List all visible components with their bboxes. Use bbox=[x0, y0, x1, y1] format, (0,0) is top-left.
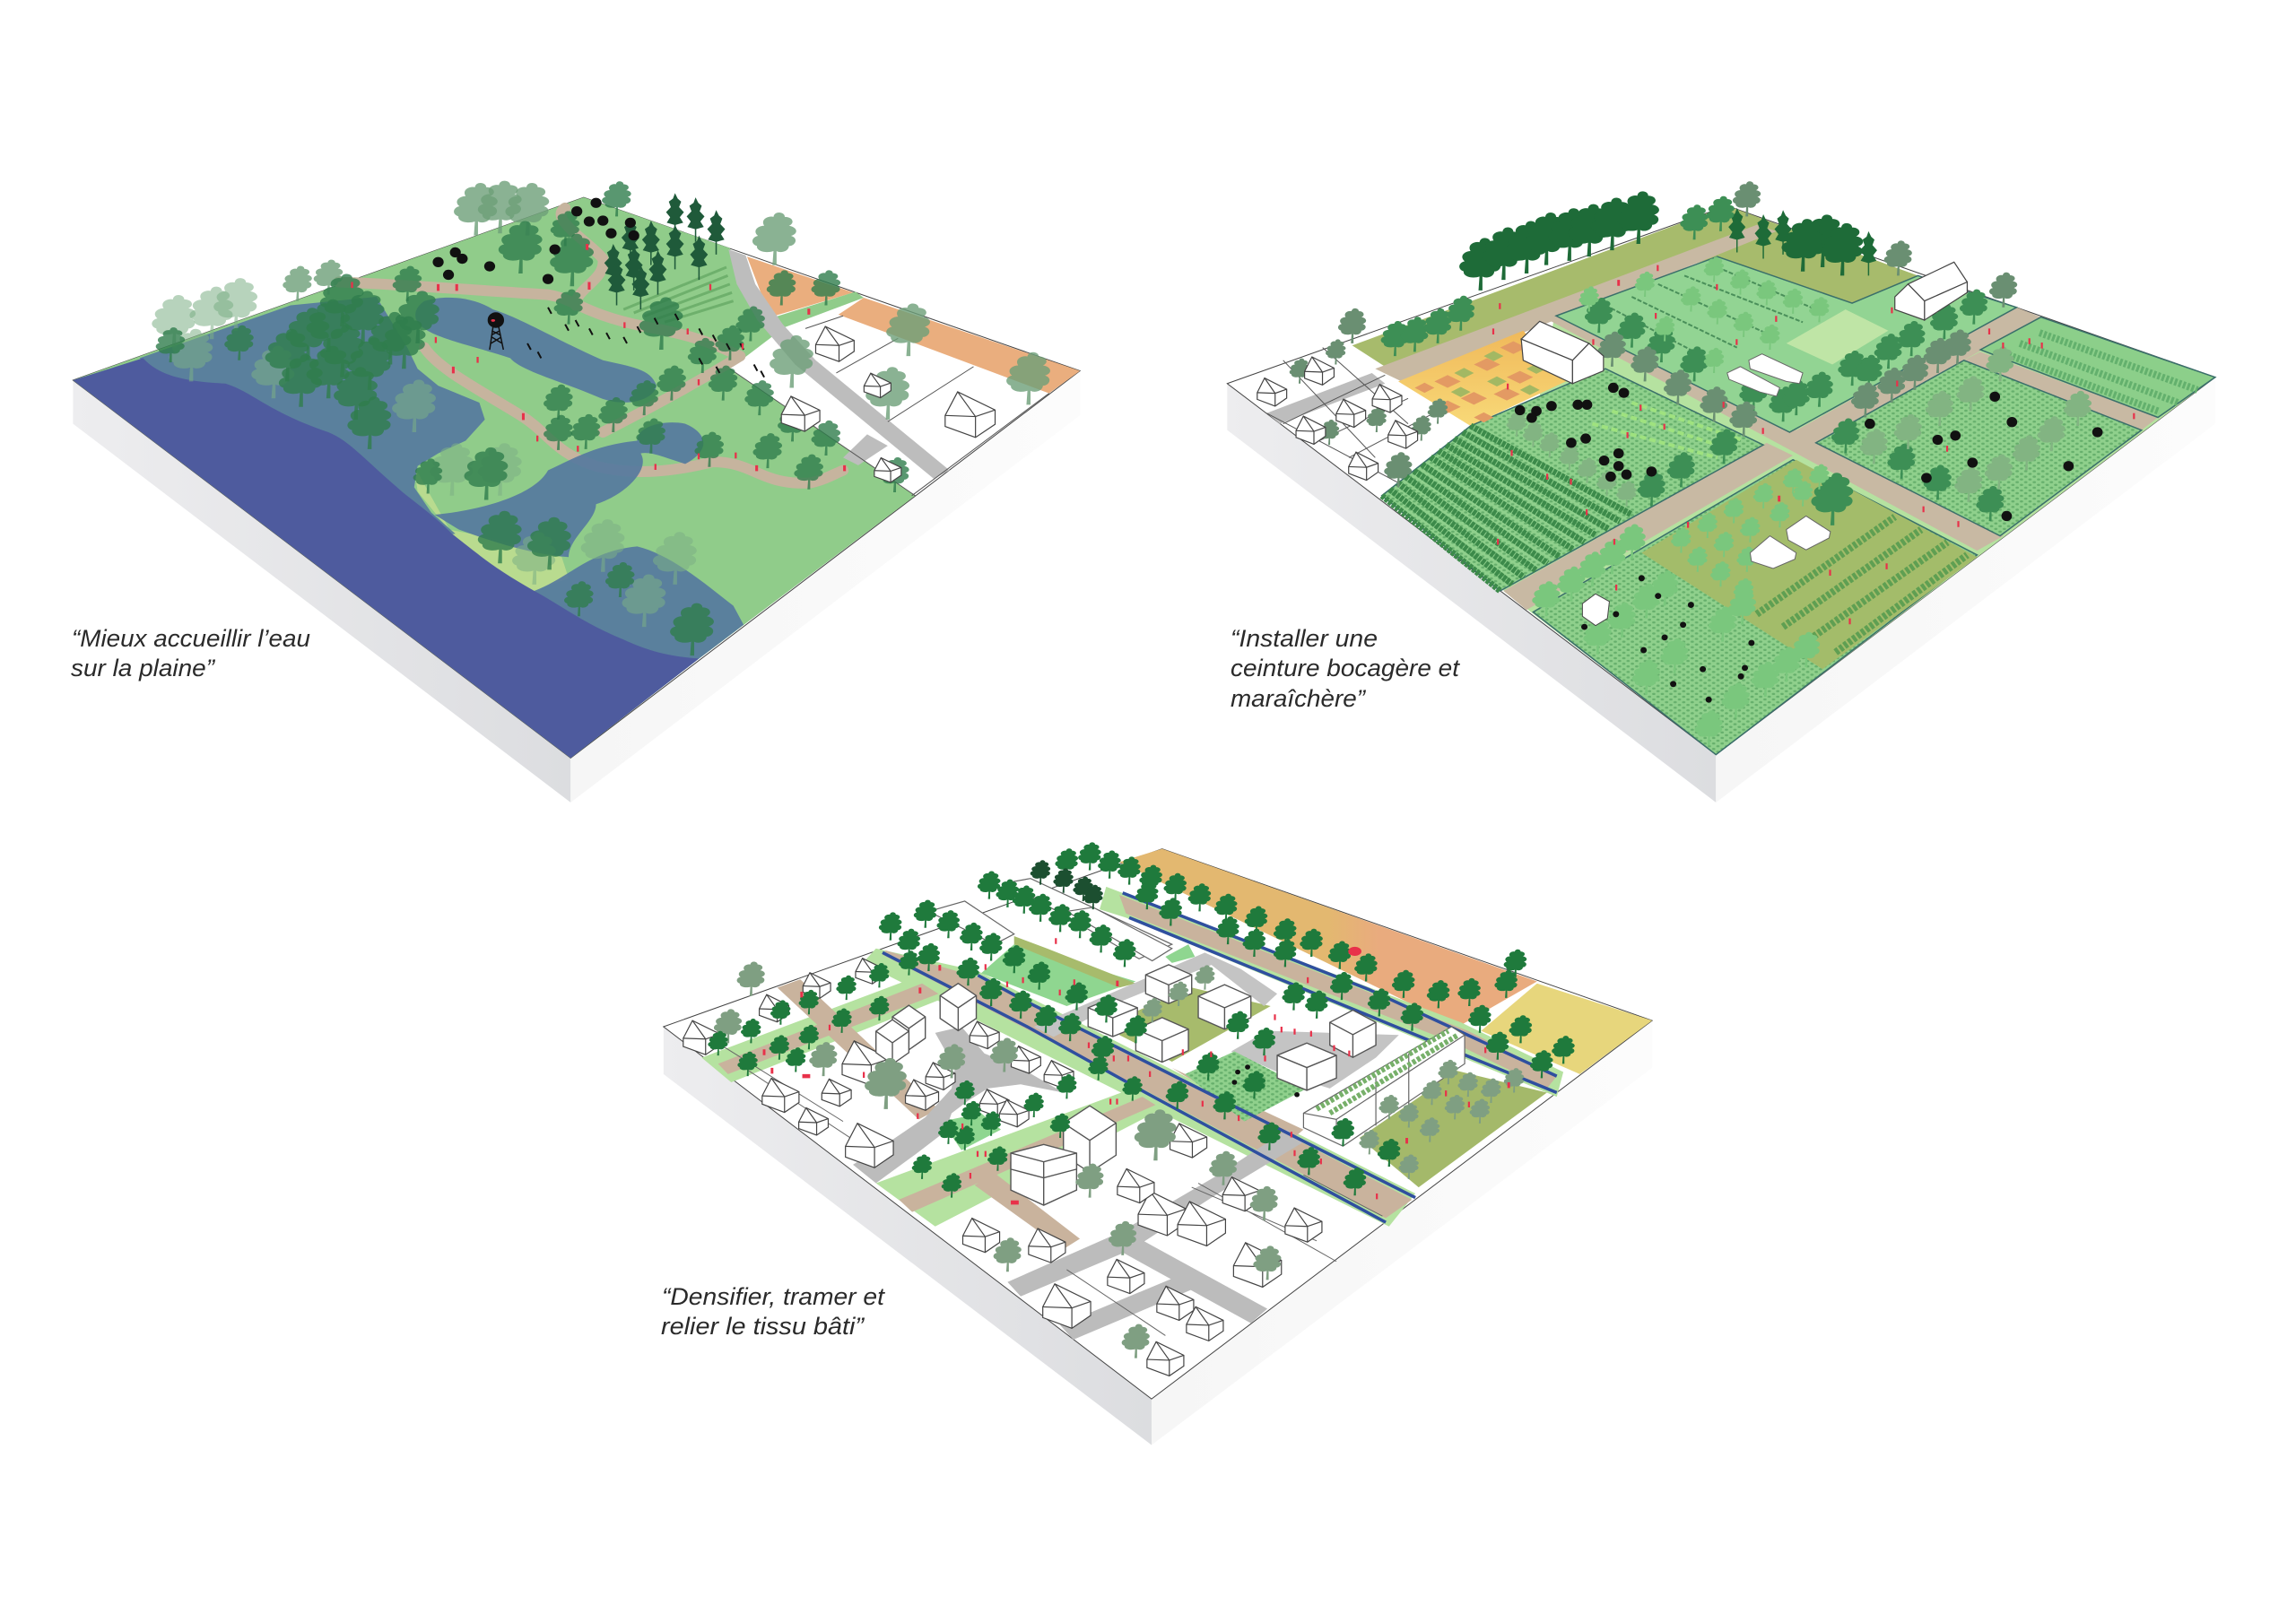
grey curved road bbox=[853, 1027, 1064, 1184]
block left side bbox=[664, 1027, 1152, 1445]
walkers bbox=[351, 244, 846, 471]
panel: bocage and market gardening block diagram bbox=[1227, 181, 2215, 803]
block top surface bbox=[664, 849, 1652, 1399]
block left side bbox=[1227, 384, 1716, 803]
roads bbox=[1375, 225, 2158, 610]
barn: right bbox=[1895, 262, 1967, 320]
field: orchard bbox=[1641, 460, 1977, 669]
hedgerow strip bbox=[1352, 206, 1918, 369]
upper corridor track bbox=[1119, 895, 1557, 1089]
lower corridor verge bbox=[863, 949, 1415, 1227]
cross streets bbox=[701, 977, 1162, 1227]
block right side bbox=[1716, 378, 2215, 803]
block left side bbox=[73, 380, 570, 803]
animals bbox=[1231, 1064, 1300, 1098]
crop rows bbox=[1382, 426, 1631, 591]
field: flower plot bbox=[1398, 331, 1566, 426]
upper corridor bbox=[1100, 887, 1563, 1097]
yellow field bbox=[1481, 984, 1652, 1074]
grey road bbox=[728, 249, 950, 479]
caption: water: “Mieux accueillir l’eau bbox=[72, 625, 310, 652]
field: middle left bbox=[1382, 369, 1763, 591]
shed bbox=[1582, 594, 1609, 626]
greenhouse rooftop building bbox=[1303, 1027, 1465, 1146]
block top surface bbox=[73, 197, 1080, 758]
light orchard trees bbox=[1532, 256, 1830, 745]
caption: water: sur la plaine” bbox=[71, 655, 215, 681]
mid green trees bbox=[1381, 196, 2005, 525]
caption: bocage bbox=[1231, 625, 1461, 712]
green patches among flowers bbox=[1451, 351, 1546, 397]
field: top right bbox=[1980, 317, 2215, 417]
village road bbox=[1266, 373, 1385, 424]
caption: bocage: “Installer une bbox=[1231, 625, 1378, 652]
riparian and meadow trees bbox=[156, 181, 909, 655]
caption: water bbox=[71, 625, 310, 681]
livestock bbox=[1515, 383, 2102, 521]
plantation trees bbox=[1459, 191, 1877, 291]
houses bbox=[683, 959, 1322, 1376]
caption: built fabric: relier le tissu bâti” bbox=[661, 1313, 865, 1340]
block right side bbox=[1152, 1020, 1652, 1445]
caption: built fabric bbox=[661, 1283, 886, 1340]
tractor bbox=[1348, 947, 1361, 956]
green strip with path bbox=[775, 291, 864, 328]
lot boundaries bbox=[730, 316, 1049, 496]
vine block bbox=[1787, 309, 1888, 365]
houses bbox=[781, 326, 996, 482]
olive orchard bbox=[1360, 1068, 1547, 1187]
greenhouses bbox=[1727, 354, 1831, 568]
block top surface bbox=[1227, 206, 2215, 755]
river bbox=[73, 358, 699, 758]
top right rows bbox=[2000, 333, 2197, 411]
flooded zones bbox=[140, 297, 744, 678]
bird flock bbox=[527, 308, 764, 378]
field: right pasture bbox=[1816, 360, 2142, 536]
apartment bars bbox=[928, 879, 1172, 961]
pedestrians bbox=[763, 938, 1510, 1204]
grey lower road bbox=[1007, 1130, 1303, 1340]
panel: water scenario block diagram bbox=[73, 181, 1080, 803]
grey upper lane and plaza bbox=[1034, 952, 1399, 1089]
lower corridor track bbox=[883, 950, 1412, 1219]
crop fields bbox=[1119, 849, 1537, 1027]
caption: built fabric: “Densifier, tramer et bbox=[662, 1283, 886, 1310]
dark plantation bbox=[1031, 860, 1103, 909]
pale trees bbox=[283, 181, 1050, 420]
grey-green trees bbox=[714, 962, 1524, 1358]
wet meadow bbox=[414, 466, 569, 591]
houses bbox=[1257, 357, 1418, 481]
field margins bbox=[1503, 308, 2215, 755]
meadow bbox=[73, 197, 915, 758]
street tracks bbox=[718, 979, 1303, 1249]
icon: water tower bbox=[488, 313, 503, 350]
crop field bbox=[623, 267, 734, 322]
vegetable rows bbox=[1605, 267, 1816, 360]
cattle bbox=[432, 198, 639, 284]
pale pasture trees bbox=[1507, 346, 2092, 507]
field: bottom pasture bbox=[1533, 460, 1977, 755]
orange field bbox=[747, 256, 1080, 394]
panel: densified built fabric block diagram bbox=[664, 842, 1652, 1445]
tall street trees bbox=[708, 842, 1575, 1198]
large buildings bbox=[876, 965, 1376, 1205]
flower patches bbox=[1414, 342, 1533, 422]
small livestock bbox=[1581, 575, 1754, 703]
caption: bocage: maraîchère” bbox=[1231, 685, 1366, 712]
rooftop crops bbox=[1317, 1031, 1458, 1113]
field: upper market garden bbox=[1556, 256, 2016, 432]
lot lines bbox=[1266, 348, 1438, 491]
dotted meadow bbox=[1185, 1052, 1307, 1122]
lot lines bbox=[711, 1039, 1382, 1335]
dark conifer plantation bbox=[604, 193, 725, 309]
footpaths bbox=[339, 208, 843, 483]
caption: bocage: ceinture bocagère et bbox=[1231, 655, 1461, 681]
blue drainage lines bbox=[883, 893, 1557, 1222]
small green squares bbox=[942, 944, 1195, 1150]
sketch trees bbox=[152, 278, 697, 627]
grey-green road trees bbox=[1290, 181, 2017, 487]
olive strips bbox=[1014, 936, 1271, 1062]
block right side bbox=[570, 371, 1080, 803]
barn: left bbox=[1521, 321, 1604, 384]
walkers bbox=[1492, 265, 2135, 624]
light rows bbox=[1592, 403, 1744, 457]
vine rows bbox=[1757, 516, 1967, 652]
